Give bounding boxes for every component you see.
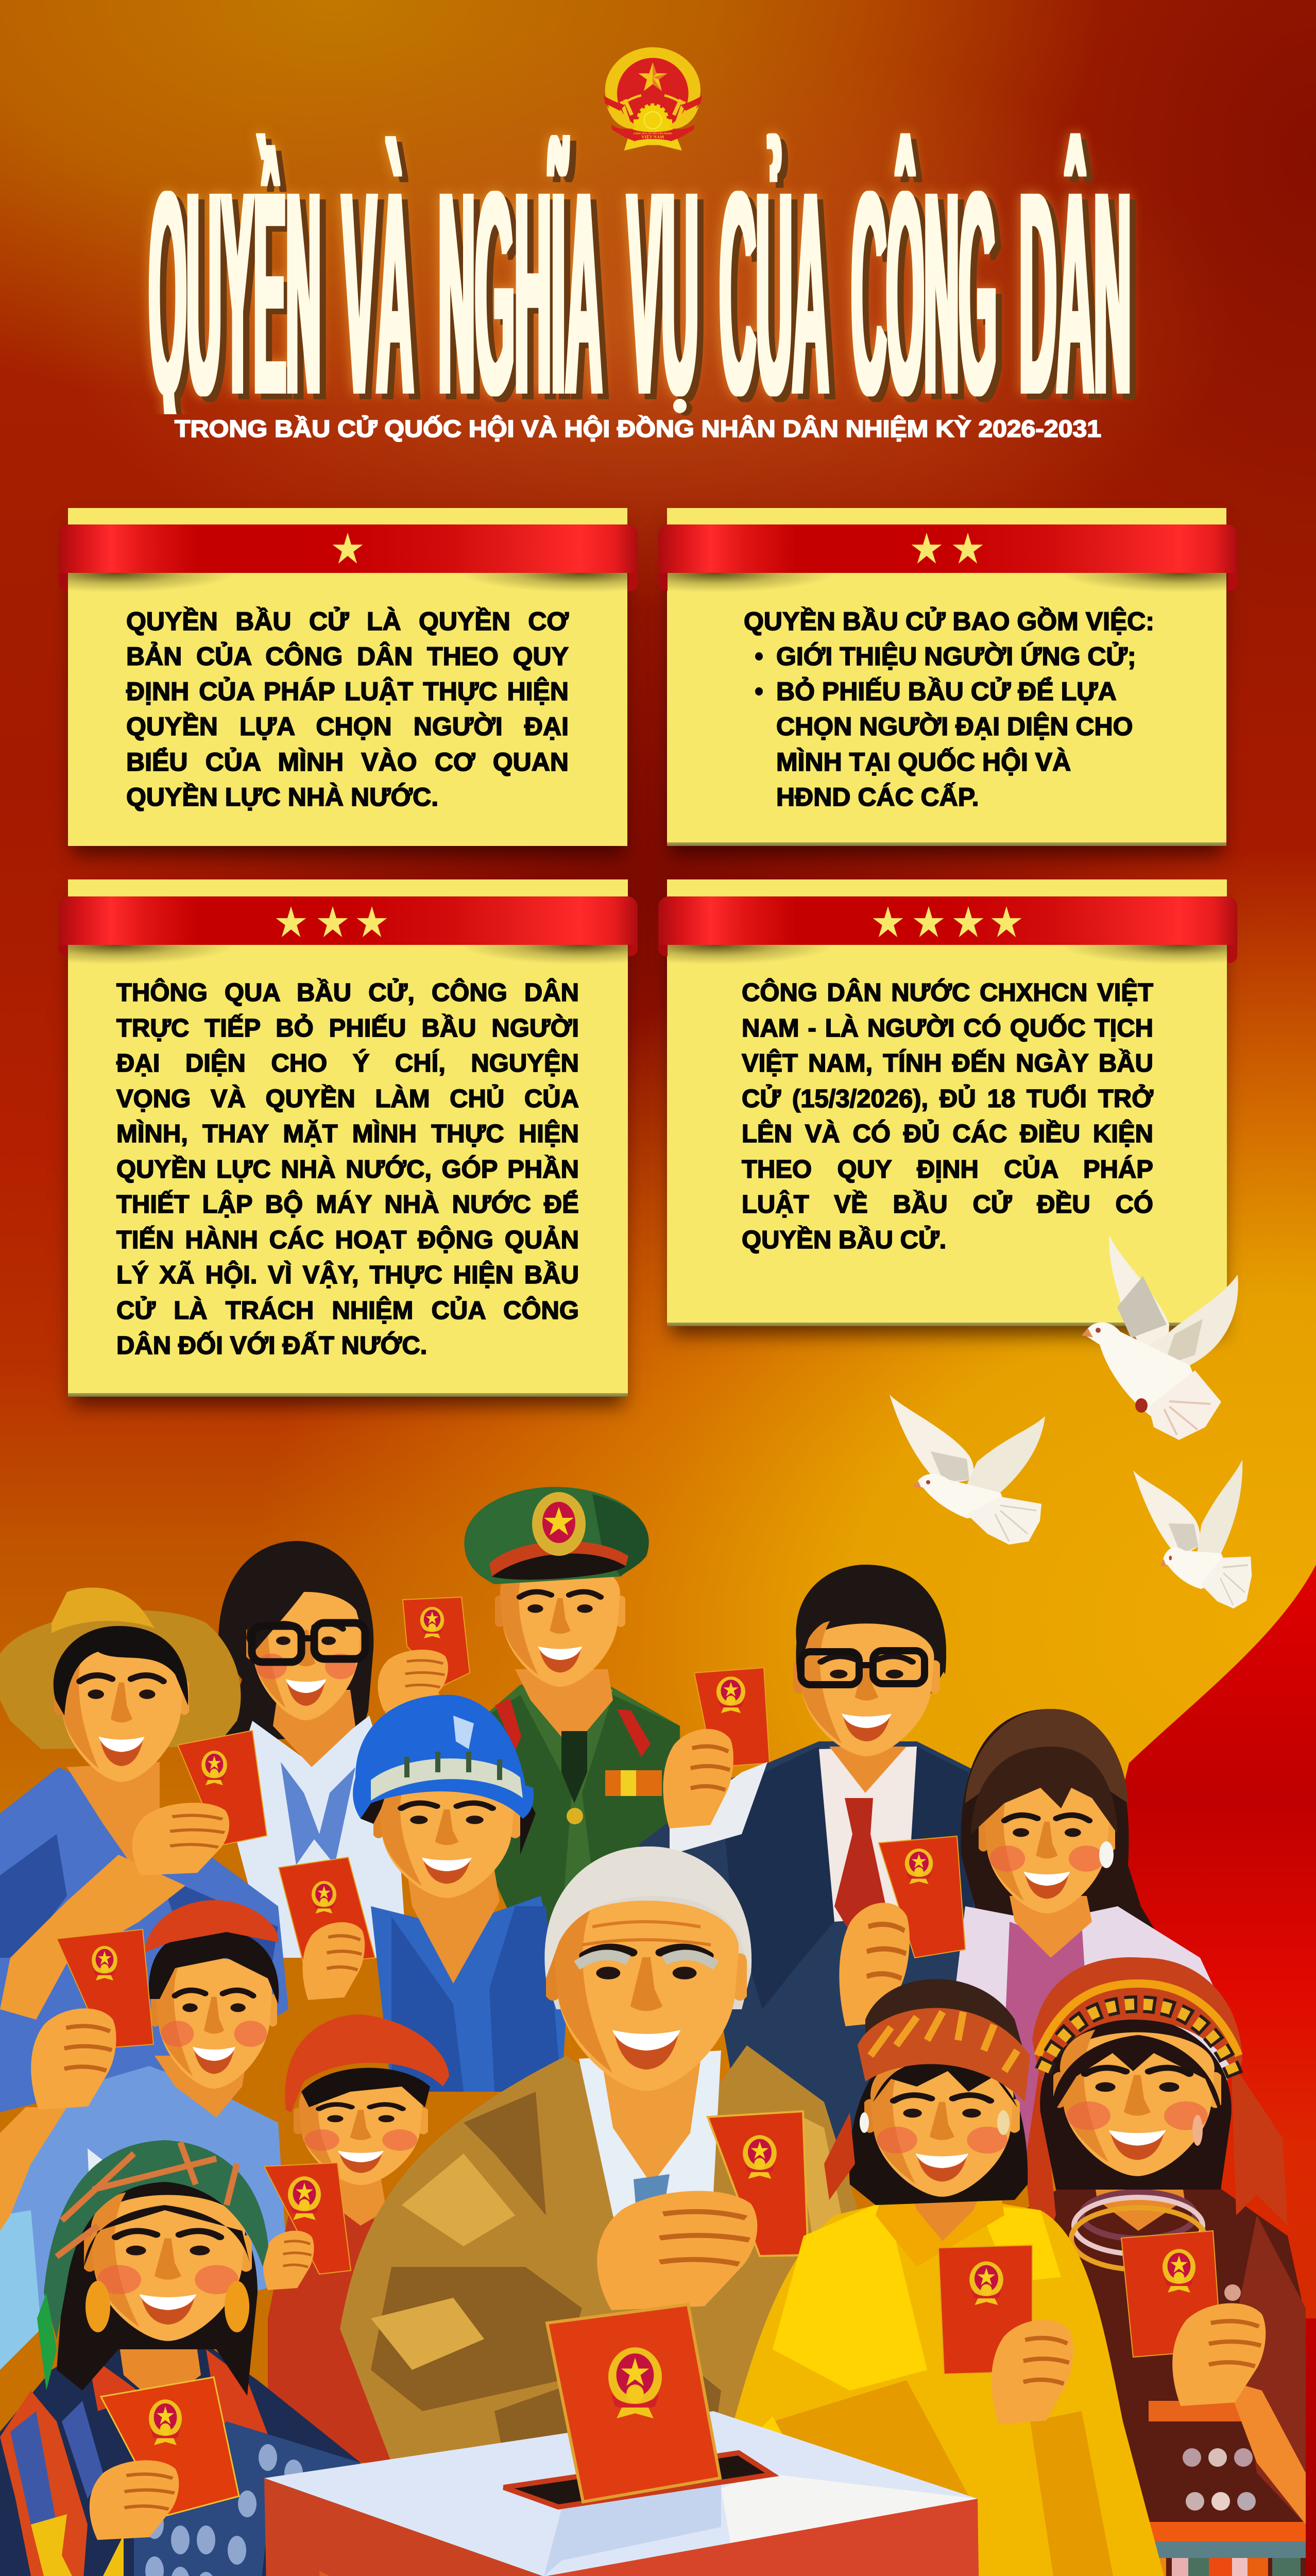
- text block card 3: [116, 978, 579, 1360]
- person: boy with red cap: [0, 1900, 288, 2370]
- text block card 3: THÔNG QUA BẦU CỬ, CÔNG DÂN: [116, 979, 579, 1007]
- ribbon with two stars: [658, 524, 1237, 591]
- text block card 4: QUYỀN BẦU CỬ.: [742, 1226, 946, 1254]
- panel: card 2 what voting includes: [667, 508, 1226, 846]
- text block card 3: ĐẠI DIỆN CHO Ý CHÍ, NGUYỆN: [116, 1049, 579, 1077]
- text block card 2: HĐND CÁC CẤP.: [776, 783, 979, 811]
- text block card 2: GIỚI THIỆU NGƯỜI ỨNG CỬ;: [776, 642, 1136, 671]
- text block card 2: BỎ PHIẾU BẦU CỬ ĐỂ LỰA: [776, 677, 1117, 706]
- card and hand of woman with glasses: [378, 1597, 470, 1762]
- text block card 2: CHỌN NGƯỜI ĐẠI DIỆN CHO: [776, 712, 1133, 741]
- text block card 2: [744, 606, 1154, 811]
- person: soldier: [464, 1487, 770, 1958]
- title dot under letter U: [673, 399, 692, 416]
- text block card 3: TRỰC TIẾP BỎ PHIẾU BẦU NGƯỜI: [116, 1014, 579, 1042]
- title: VỤ: [627, 130, 698, 455]
- ballot slot: [504, 2453, 772, 2507]
- card and hand of brown hair woman: [839, 1836, 965, 2026]
- card of soldier: [694, 1668, 770, 1767]
- text block card 3: VỌNG VÀ QUYỀN LÀM CHỦ CỦA: [116, 1085, 579, 1113]
- person: businessman with glasses: [639, 1565, 994, 2164]
- subtitle: TRONG BẦU CỬ QUỐC HỘI VÀ HỘI ĐỒNG NHÂN DÂN NHIỆM KỲ 2026-2031: [175, 415, 1101, 442]
- text block card 3: MÌNH, THAY MẶT MÌNH THỰC HIỆN: [116, 1120, 579, 1148]
- panel: card 3 civic responsibility: [68, 879, 628, 1397]
- text block card 4: VIỆT NAM, TÍNH ĐẾN NGÀY BẦU: [742, 1049, 1153, 1077]
- icon: dove right: [1133, 1436, 1258, 1635]
- text block card 3: CỬ LÀ TRÁCH NHIỆM CỦA CÔNG: [116, 1297, 579, 1325]
- soldier hand over the businessman sleeve: [663, 1729, 767, 1855]
- card and hand of ethnic woman: [1121, 2231, 1306, 2524]
- person: woman with glasses: [218, 1541, 470, 1958]
- ballot box: [264, 2411, 981, 2576]
- right edge strip: [1306, 2318, 1316, 2576]
- card and hand of plaid scarf woman: [90, 2377, 239, 2540]
- ballot card above the slot: [547, 2304, 720, 2502]
- person: woman in yellow dress: [713, 1979, 1164, 2576]
- text block card 4: LÊN VÀ CÓ ĐỦ CÁC ĐIỀU KIỆN: [742, 1120, 1153, 1148]
- card and hand of boy: [0, 1929, 153, 2231]
- text block card 4: LUẬT VỀ BẦU CỬ ĐỀU CÓ: [742, 1191, 1153, 1218]
- icon: national emblem: [604, 47, 702, 150]
- text block card 4: [741, 978, 1154, 1254]
- red flag behind the people: [1082, 1565, 1316, 2576]
- panel: card 4 voter eligibility: [667, 879, 1227, 1326]
- text block card 3: QUYỀN LỰC NHÀ NƯỚC, GÓP PHẦN: [116, 1156, 579, 1183]
- text block card 1: BẢN CỦA CÔNG DÂN THEO QUY: [126, 642, 569, 671]
- text block card 1: BIỂU CỦA MÌNH VÀO CƠ QUAN: [126, 748, 569, 776]
- ribbon with one star: [59, 524, 638, 591]
- icon: dove middle: [890, 1395, 1045, 1545]
- text block card 1: QUYỀN LỰA CHỌN NGƯỜI ĐẠI: [126, 712, 569, 741]
- child card and hand: [263, 2163, 351, 2290]
- text block card 4: THEO QUY ĐỊNH CỦA PHÁP: [742, 1156, 1153, 1183]
- person: ethnic woman with beaded headdress: [1016, 1957, 1306, 2576]
- panel: card 1 right to vote definition: [68, 508, 627, 846]
- text block card 3: DÂN ĐỐI VỚI ĐẤT NƯỚC.: [116, 1332, 427, 1360]
- card and hand of worker: [279, 1857, 375, 2000]
- icon: national emblem: VIỆT NAM: [641, 134, 664, 139]
- ribbon with three stars: [59, 896, 638, 963]
- person: worker in blue helmet: [279, 1695, 567, 2092]
- person: woman with brown hair: [839, 1709, 1236, 2164]
- text block card 4: CỬ (15/3/2026), ĐỦ 18 TUỔI TRỞ: [742, 1085, 1153, 1113]
- text block card 3: LÝ XÃ HỘI. VÌ VẬY, THỰC HIỆN BẦU: [116, 1261, 579, 1289]
- text block card 4: NAM - LÀ NGƯỜI CÓ QUỐC TỊCH: [742, 1014, 1153, 1042]
- text block card 4: CÔNG DÂN NƯỚC CHXHCN VIỆT: [742, 979, 1153, 1007]
- text block card 3: TIẾN HÀNH CÁC HOẠT ĐỘNG QUẢN: [116, 1226, 579, 1254]
- text block card 2: MÌNH TẠI QUỐC HỘI VÀ: [776, 748, 1071, 776]
- person: woman with plaid scarf: [0, 2140, 361, 2576]
- card and hand of farmer: [0, 1731, 267, 2020]
- title: VÀ: [342, 130, 414, 455]
- text block card 1: ĐỊNH CỦA PHÁP LUẬT THỰC HIỆN: [126, 677, 569, 706]
- title: QUYỀN: [149, 130, 321, 455]
- text block card 1: QUYỀN LỰC NHÀ NƯỚC.: [126, 783, 438, 811]
- icon: national emblem: CỘNG HÒA XÃ HỘI CHỦ NGHĨA: [634, 131, 672, 135]
- card and hand of elderly man: [597, 2111, 808, 2310]
- text block card 1: QUYỀN BẦU CỬ LÀ QUYỀN CƠ: [126, 607, 569, 636]
- text block card 2: QUYỀN BẦU CỬ BAO GỒM VIỆC:: [744, 607, 1154, 636]
- person: child with red cap: [268, 2014, 449, 2463]
- card and hand of yellow dress woman: [938, 2245, 1073, 2424]
- ribbon with four stars: [658, 896, 1237, 963]
- person: elderly man: [340, 1846, 876, 2463]
- icon: dove large: [1082, 1235, 1238, 1440]
- person: farmer in straw hat: [0, 1587, 288, 2112]
- text block card 1: [126, 606, 569, 811]
- text block card 3: THIẾT LẬP BỘ MÁY NHÀ NƯỚC ĐỂ: [116, 1191, 579, 1218]
